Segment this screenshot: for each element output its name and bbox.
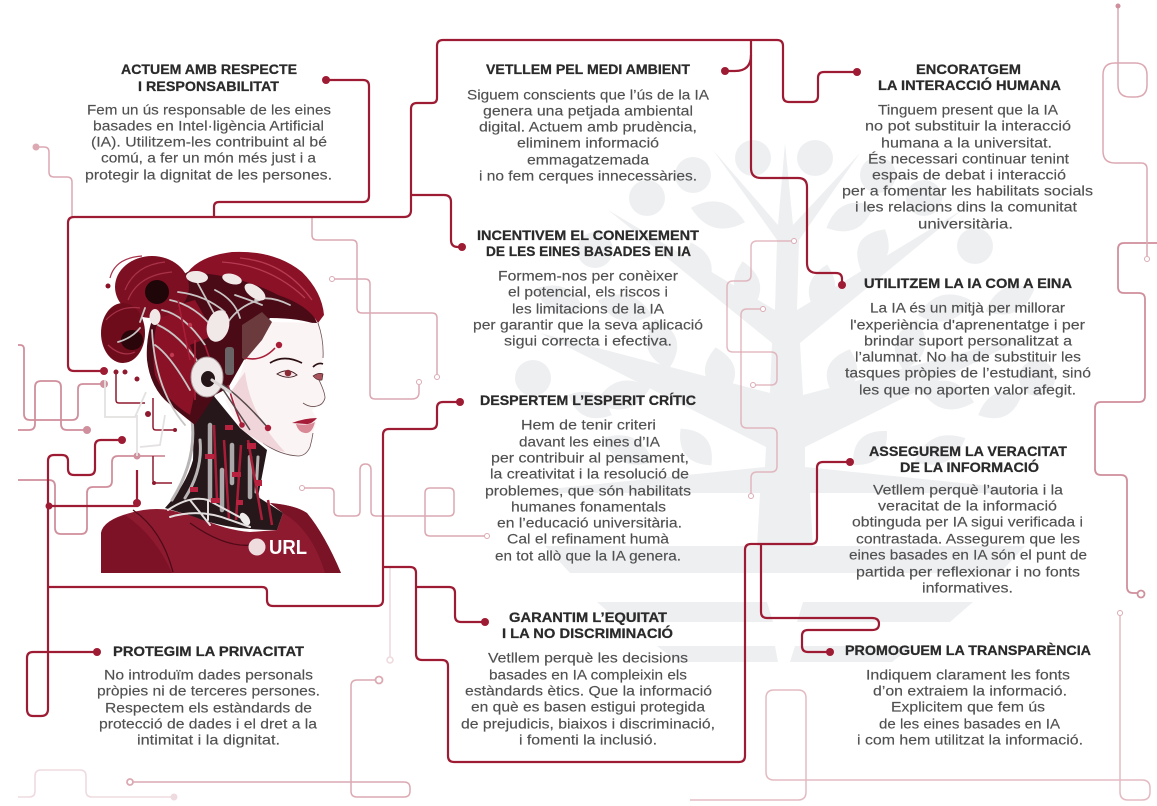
heading: UTILITZEM LA IA COM A EINA [864,276,1072,291]
body text: basades en IA compleixin els [489,666,687,682]
body text: Tinguem present que la IA [878,102,1059,118]
body text: humanes fonamentals [511,498,666,514]
card: incentivem el coneixement [473,228,703,348]
second eye [313,373,323,380]
neck cables [168,420,272,527]
heading: INCENTIVEM EL CONEIXEMENT [477,228,700,243]
body text: partida per reflexionar i no fonts [856,564,1080,580]
hair bun upper [115,256,189,318]
heading [878,62,1061,93]
neck wiring [165,395,283,530]
body text: brindar suport personalitzat a [864,332,1072,348]
body text: emmagatzemada [527,152,649,168]
card: actuem amb respecte [85,62,332,182]
body text: Vetllem perquè les decisions [488,650,688,666]
body text: Fem un ús responsable de les eines [87,102,331,118]
body text [467,86,710,184]
body text [85,102,332,182]
body text: per a fomentar les habilitats socials [842,182,1093,198]
leaves [530,194,1040,474]
heading: GARANTIM L’EQUITAT [509,610,668,625]
hair bun shadow [145,280,169,304]
body text: l’alumnat. No ha de substituir les [855,348,1081,364]
heading: I RESPONSABILITAT [138,79,280,94]
body text: Vetllem perquè l’autoria i la [873,482,1063,498]
heading [477,228,700,259]
heading: PROTEGIM LA PRIVACITAT [113,644,305,659]
bun highlights [106,256,172,354]
body text [473,268,703,348]
body text: Hem de tenir criteri [521,416,656,432]
body text: intimitat i la dignitat. [137,732,280,748]
body text [849,482,1087,596]
body text: veracitat de la informació [878,498,1057,514]
body text: per garantir que la seva aplicació [473,316,703,332]
body text: comú, a fer un món més just i a [101,150,316,166]
body text [97,666,320,748]
scalp wires [106,282,290,431]
body text: contrastada. Assegurem que les [856,530,1080,546]
body text: l'experiència d'aprenentatge i per [850,316,1085,332]
base bands [545,546,1025,662]
body text: pròpies ni de terceres persones. [97,682,320,698]
body text: no pot substituir la interacció [865,118,1071,134]
heading: I LA NO DISCRIMINACIÓ [502,626,673,641]
face [225,322,325,456]
face outline [263,323,325,456]
body text: Explicitem que fem ús [891,698,1045,714]
heading: ASSEGUREM LA VERACITAT [869,444,1068,459]
heading: DE LA INFORMACIÓ [900,460,1039,475]
body text: i com hem utilitzat la informació. [857,732,1083,748]
body text: en tot allò que la IA genera. [495,548,681,564]
body text: eliminem informació [517,134,659,150]
heading [502,610,673,641]
connector dots [46,67,861,656]
body text: el potencial, els riscos i [508,284,668,300]
body text: genera una petjada ambiental [483,102,693,118]
card: vetllem pel medi ambient [467,62,710,184]
scalp pads [150,270,268,344]
body text [845,300,1091,398]
eye [277,371,297,377]
card: utilitzem la IA com a eina [845,276,1091,398]
small circuit near head [105,370,177,485]
ear cable [212,380,230,392]
back of head [147,268,318,425]
heading [121,62,297,94]
heading: ENCORATGEM [916,62,1021,77]
body text: No introduïm dades personals [104,666,313,682]
body text: sigui correcta i efectiva. [504,332,672,348]
body text: (IA). Utilitzem-les contribuint al bé [91,134,327,150]
card: encoratgem la interacció humana [842,62,1093,232]
body text: de les eines basades en IA [879,716,1061,732]
body text: Formem-nos per conèixer [498,268,678,284]
body text: protegir la dignitat de les persones. [85,166,332,182]
body text: davant les eines d’IA [519,434,661,450]
URL logo on shirt [248,537,307,559]
ear inner [201,371,215,387]
heading: PROMOGUEM LA TRANSPARÈNCIA [845,643,1091,658]
heading [869,444,1068,475]
body text: universitària. [918,216,1013,232]
tree trunk and branches [540,143,1030,547]
ear [191,357,223,397]
body text: i les relacions dins la comunitat [855,198,1077,214]
iris [285,370,291,376]
main dark circuit lines [27,40,879,762]
body text: i no fem cerques innecessàries. [479,168,697,184]
body text: problemes, que són habilitats [485,482,691,498]
body text [857,666,1083,748]
body text: basades en Intel·ligència Artificial [93,118,324,134]
body text: obtinguda per IA sigui verificada i [852,514,1083,530]
body text: espais de debat i interacció [872,166,1066,182]
shirt seams [133,510,252,572]
body text: per contribuir al pensament, [491,450,689,466]
left shoulder shade [101,515,172,573]
card: assegurem la veracitat [849,444,1087,596]
heading: LA INTERACCIÓ HUMANA [878,78,1061,93]
upper lip [292,418,317,424]
card: promoguem la transparència [845,643,1091,748]
body text: humana a la universitat. [881,134,1052,150]
hair bun lower [101,303,145,363]
body text: la creativitat i la resolució de [490,466,689,482]
lower bun shadow [121,330,143,350]
body text: És necessari continuar tenint [868,150,1069,166]
body text: tasques pròpies de l’estudiant, sinó [845,364,1091,380]
card: despertem l'esperit crític [480,393,696,564]
heading: DE LES EINES BASADES EN IA [486,244,691,259]
heading: ACTUEM AMB RESPECTE [121,62,297,77]
body text [485,416,691,564]
watermark tree logo [515,140,1055,662]
body text: informatives. [922,580,1013,596]
eyebrows [270,358,323,367]
headset [225,347,234,375]
body text: en l’educació universitària. [497,514,682,530]
body text: en què es basen estigui protegida [471,698,705,714]
body text: estàndards ètics. Que la informació [465,682,712,698]
lower lip [296,422,315,433]
body text: Indiquem clarament les fonts [866,666,1070,682]
body text: digital. Actuem amb prudència, [479,118,697,134]
face shading [232,372,285,452]
body text [461,650,715,748]
torso [101,503,341,573]
logo emblem [248,538,266,556]
body text: protecció de dades i el dret a la [99,716,317,732]
body text: Siguem conscients que l’ús de la IA [467,86,710,102]
body text: La IA és un mitjà per millorar [870,300,1065,316]
right shoulder shade [270,503,341,573]
maroon hair mass [153,300,215,415]
body text: les que no aporten valor afegit. [859,382,1076,398]
body text [842,102,1093,232]
body text: Respectem els estàndards de [105,700,312,716]
logo text: URL [269,537,307,559]
heading: VETLLEM PEL MEDI AMBIENT [486,62,691,77]
body text: de prejudicis, biaixos i discriminació, [461,716,715,732]
body text: i fomenti la inclusió. [519,732,657,748]
hair top [188,252,324,323]
brown hair patch [242,312,272,360]
heading: DESPERTEM L’ESPERIT CRÍTIC [480,393,696,408]
card: garantim l'equitat [461,610,715,748]
body text: d’on extraiem la informació. [873,682,1067,698]
body text: les limitacions de la IA [512,300,665,316]
body text: Cal el refinament humà [507,530,669,546]
portrait illustration: woman with circuit hair [101,252,341,573]
card: protegim la privacitat [97,644,320,748]
hair top highlights [222,258,312,300]
circles [515,140,1055,396]
body text: eines basades en IA són el punt de [849,546,1087,562]
